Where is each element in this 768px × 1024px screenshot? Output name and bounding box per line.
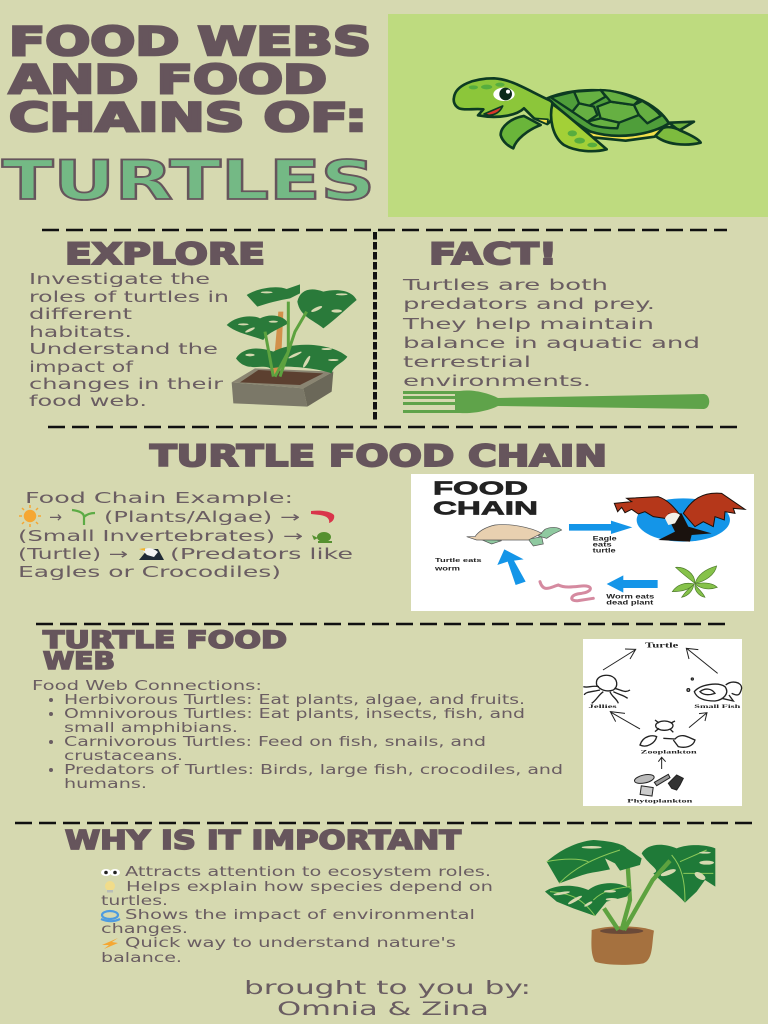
text block: fact: Turtles are both: [401, 276, 608, 294]
text block: food web connections: Food Web Connections:: [32, 679, 262, 694]
text block: food chain example: →: [49, 508, 62, 526]
title: CHAINS OF:: [9, 96, 367, 141]
title: FOOD WEBS: [9, 20, 371, 65]
chart: food web image: Small Fish: [694, 704, 742, 710]
credits: brought to you by:: [244, 977, 531, 999]
text block: explore: Understand the: [29, 340, 218, 358]
chart: food web image: Turtle: [645, 641, 678, 649]
text block: food chain example: (Small Invertebrates) →: [18, 527, 303, 545]
text block: food web connections: humans.: [64, 777, 147, 792]
text block: explore: [29, 270, 229, 410]
heading: turtle food web: WEB: [43, 647, 115, 675]
icon: plant: [672, 566, 717, 597]
text block: why is it important: turtles.: [101, 894, 168, 909]
chart: food chain image: Worm eats: [606, 594, 655, 600]
dashed dividers: [15, 230, 755, 823]
chart: food chain image: Turtle eats: [435, 558, 482, 564]
credits: [244, 977, 531, 1020]
chart: food chain image: dead plant: [606, 600, 653, 606]
text block: fact: balance in aquatic and: [403, 334, 700, 352]
icon: small turtle: [312, 532, 332, 543]
chart: food chain image: turtle: [593, 549, 617, 555]
icon: turtle: [467, 525, 562, 546]
icon: eagle: [139, 548, 164, 560]
text block: food chain example: (Plants/Algae) →: [104, 508, 300, 526]
chart: food chain image: worm: [433, 567, 460, 573]
text block: explore: different: [29, 305, 132, 323]
text block: food web connections: Predators of Turtles: Birds, large fish, crocodiles, and: [64, 763, 563, 778]
text block: food web connections: Herbivorous Turtles: Eat plants, algae, and fruits.: [64, 693, 525, 708]
credits: Omnia & Zina: [277, 998, 489, 1020]
arrow: worm to turtle: [497, 549, 526, 585]
text block: food web connections: [32, 679, 563, 792]
heading: turtle food chain: TURTLE FOOD CHAIN: [150, 439, 607, 473]
text block: fact: terrestrial: [403, 353, 531, 371]
arrows: [603, 648, 718, 769]
text block: food chain example: (Turtle) →: [18, 545, 128, 563]
text block: explore: food web.: [29, 392, 147, 410]
text block: food chain example: Food Chain Example:: [25, 489, 293, 507]
chart: food chain image: FOOD: [433, 478, 528, 499]
icon: light bulb: [105, 881, 115, 892]
text block: fact: [401, 276, 700, 390]
text block: why is it important: Quick way to understand nature's: [125, 936, 456, 951]
chart: food web image: Phytoplankton: [627, 799, 694, 805]
icon: jellies: [583, 675, 630, 703]
icon: eagle: [614, 493, 745, 542]
text block: fact: environments.: [403, 372, 591, 390]
heading: fact: FACT!: [429, 237, 557, 271]
chart: food chain image: Eagle: [593, 537, 618, 543]
text block: food web connections: crustaceans.: [64, 749, 183, 764]
text block: explore: Investigate the: [29, 270, 210, 288]
heading: turtle food web: [43, 626, 287, 675]
icon: potted monstera: [545, 840, 715, 965]
icon: seedling: [72, 510, 95, 525]
text block: why is it important: Attracts attention to ecosystem roles.: [125, 865, 491, 880]
text block: explore: roles of turtles in: [29, 288, 229, 306]
icon: eyes: [101, 869, 120, 876]
title: TURTLES: [2, 149, 375, 212]
icon: fork: [403, 391, 709, 413]
title: AND FOOD: [9, 58, 327, 103]
title: [2, 20, 375, 212]
arrow: plant to worm: [607, 575, 658, 593]
chart: food chain image: [411, 474, 754, 611]
text block: food web connections: Omnivorous Turtles: Eat plants, insects, fish, and: [64, 707, 525, 722]
icon: potted plant in planter: [227, 284, 357, 407]
text block: why is it important: changes.: [101, 922, 188, 937]
chart: food web image: Jellies: [588, 704, 618, 710]
heading: why is it important: WHY IS IT IMPORTANT: [65, 826, 461, 856]
text block: explore: impact of: [29, 358, 134, 376]
icon: phytoplankton: [634, 773, 683, 796]
chart: food web image: [583, 639, 742, 806]
text block: why is it important: [101, 865, 493, 966]
icon: lightning: [102, 938, 118, 949]
icon: worm: [540, 582, 593, 601]
icon: sun: [19, 505, 41, 527]
text block: explore: habitats.: [29, 323, 132, 341]
chart: food web image: Zooplankton: [641, 749, 698, 755]
chart: food chain image: eats: [593, 543, 613, 549]
text block: food chain example: Eagles or Crocodiles): [18, 563, 281, 581]
panel: turtle illustration: [388, 14, 768, 217]
text block: why is it important: Shows the impact of environmental: [125, 908, 475, 923]
icon: shrimp: [311, 511, 334, 523]
icon: cyclone: [101, 911, 120, 921]
text block: why is it important: balance.: [101, 951, 182, 966]
text block: fact: They help maintain: [401, 315, 654, 333]
arrow: turtle to eagle: [569, 521, 632, 534]
text block: food chain example: [18, 489, 353, 581]
text block: explore: changes in their: [29, 375, 224, 393]
text block: why is it important: Helps explain how species depend on: [126, 880, 493, 895]
icon: small fish: [687, 678, 742, 701]
icon: zooplankton: [640, 720, 695, 747]
text block: fact: predators and prey.: [403, 295, 655, 313]
text block: food chain example: (Predators like: [170, 545, 353, 563]
chart: food chain image: CHAIN: [433, 498, 538, 519]
text block: food web connections: small amphibians.: [64, 721, 238, 736]
heading: explore: EXPLORE: [65, 237, 265, 271]
text block: food web connections: Carnivorous Turtles: Feed on fish, snails, and: [64, 735, 486, 750]
heading: turtle food web: TURTLE FOOD: [43, 626, 287, 654]
